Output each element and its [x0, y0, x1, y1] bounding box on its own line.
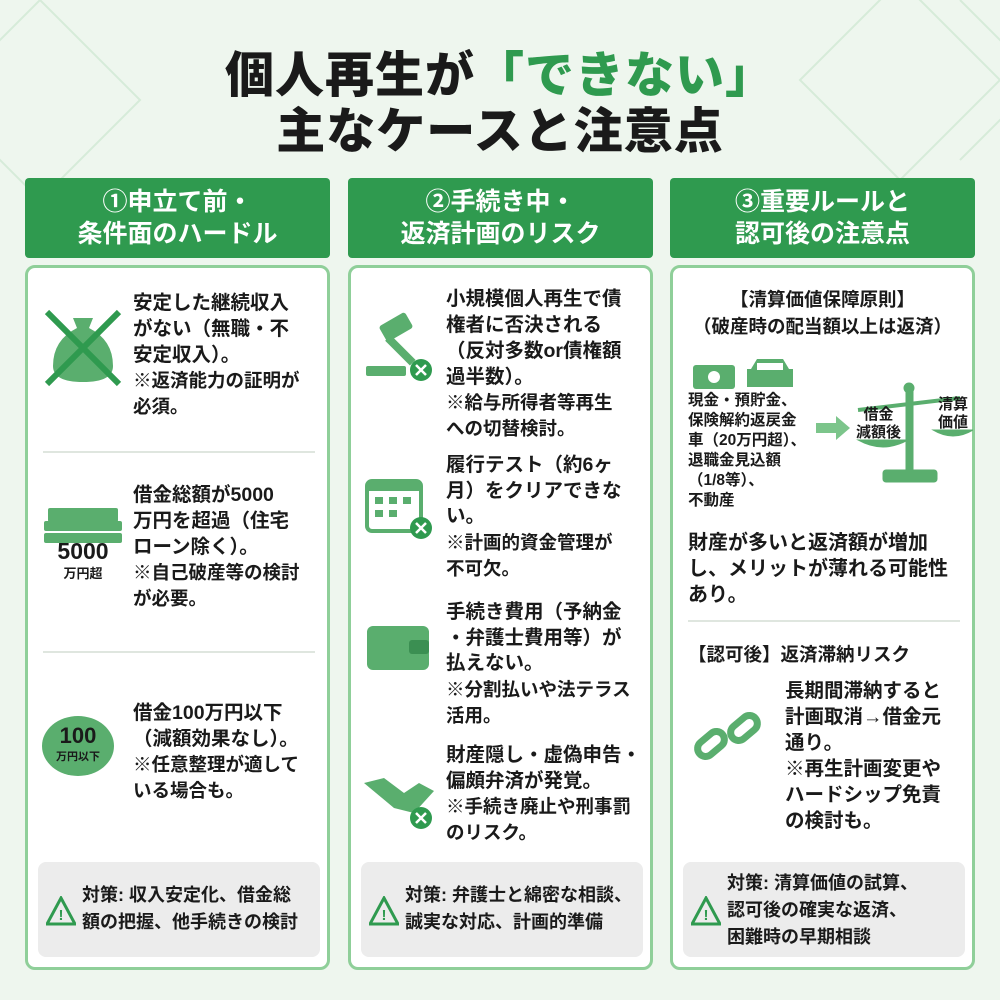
- header: col3: [670, 178, 975, 258]
- icon: 5000 bills: [44, 508, 122, 581]
- icon: 5000 bills: 5000: [57, 538, 109, 564]
- icon: warning: [46, 896, 76, 926]
- icon: wallet: [367, 626, 429, 670]
- icon: calendar: [365, 479, 432, 539]
- icon: scale: 借金: [864, 406, 894, 423]
- panel: col1: [25, 265, 330, 970]
- arrow: [816, 416, 850, 440]
- title: [225, 48, 775, 159]
- callout: col2: 誠実な対応、計画的準備: [405, 912, 603, 932]
- text: item3: ※分割払いや法テラス: [446, 678, 631, 700]
- text: item1: がない（無職・不: [133, 318, 289, 340]
- callout: col2: 対策: 弁護士と綿密な相談、: [405, 885, 632, 905]
- text: item1: [446, 288, 622, 439]
- text: item3: 手続き費用（予納金: [446, 601, 622, 623]
- title: 個人再生が「できない」: [225, 49, 775, 103]
- text: after approval detail: 通り。: [785, 732, 843, 754]
- icon: scale: [856, 382, 973, 482]
- icon: warning: [691, 896, 721, 926]
- text: asset list: [688, 392, 806, 509]
- callout: col3: 対策: 清算価値の試算、: [727, 873, 918, 893]
- text: item3: ・弁護士費用等）が: [446, 626, 622, 648]
- text: item4: 財産隠し・虚偽申告・: [446, 744, 641, 766]
- text: item2: 月）をクリアできな: [446, 480, 622, 502]
- icon: 100 coin: 100: [60, 723, 96, 748]
- icon: warning: !: [704, 907, 708, 924]
- text: item1: 権者に否決される: [446, 314, 602, 336]
- heading: principle: [693, 289, 952, 337]
- text: item1: [133, 292, 300, 417]
- text: after approval detail: の検討も。: [785, 810, 883, 832]
- text: item2: 不可欠。: [446, 558, 520, 579]
- text: item2: い。: [446, 505, 485, 527]
- text: item3: （減額効果なし）。: [133, 728, 299, 750]
- text: after approval detail: [785, 680, 941, 832]
- header: col3: 認可後の注意点: [735, 220, 910, 248]
- text: item3: いる場合も。: [133, 780, 244, 801]
- text: item2: ※自己破産等の検討: [133, 562, 300, 583]
- text: item1: 安定収入）。: [133, 344, 240, 366]
- callout: col1: [38, 862, 320, 957]
- header: col1: 条件面のハードル: [77, 220, 278, 248]
- text: item4: ※手続き廃止や刑事罰: [446, 796, 631, 817]
- header: col2: ②手続き中・: [425, 188, 576, 216]
- text: item2: [133, 484, 300, 609]
- text: item2: 履行テスト（約6ヶ: [446, 454, 613, 476]
- heading: principle: （破産時の配当額以上は返済）: [693, 316, 952, 337]
- text: item2: が必要。: [133, 588, 207, 609]
- title: 主なケースと注意点: [276, 105, 724, 159]
- callout: col1: 対策: 収入安定化、借金総: [82, 885, 291, 905]
- text: item3: 活用。: [446, 705, 502, 726]
- text: item3: [133, 702, 299, 801]
- icon: scale: 価値: [938, 414, 968, 431]
- text: item2: 借金総額が5000: [133, 484, 274, 506]
- text: item2: [446, 454, 622, 579]
- callout: col3: 認可後の確実な返済、: [727, 900, 907, 920]
- icon: handshake: [364, 778, 434, 829]
- text: asset list: 不動産: [688, 492, 735, 509]
- header: col1: ①申立て前・: [102, 188, 252, 216]
- icon: 100 coin: [42, 716, 114, 776]
- callout: col2: [361, 862, 643, 957]
- text: item1: 小規模個人再生で債: [446, 288, 622, 310]
- text: item4: のリスク。: [446, 822, 537, 843]
- text: item1: 必須。: [133, 396, 189, 417]
- text: item1: （反対多数or債権額: [446, 340, 622, 362]
- text: asset list: 車（20万円超）、: [688, 432, 806, 449]
- text: item1: ※返済能力の証明が: [133, 370, 300, 391]
- panel: col2: [348, 265, 653, 970]
- text: asset list: （1/8等）、: [688, 472, 764, 489]
- text: item4: 偏頗弁済が発覚。: [446, 770, 602, 792]
- text: item1: への切替検討。: [446, 418, 576, 439]
- header: col2: 返済計画のリスク: [400, 220, 600, 248]
- text: item2: 万円を超過（住宅: [133, 510, 289, 532]
- callout: col1: 額の把握、他手続きの検討: [82, 912, 298, 932]
- text: item2: ※計画的資金管理が: [446, 532, 613, 552]
- icon: scale: 減額後: [856, 424, 901, 441]
- icon: 100 coin: 万円以下: [56, 751, 100, 763]
- icon: warning: !: [382, 907, 386, 924]
- text: asset warning: あり。: [688, 584, 748, 606]
- heading: principle: 【清算価値保障原則】: [730, 289, 915, 310]
- icon: gavel: [366, 312, 432, 381]
- text: asset list: 現金・預貯金、: [688, 392, 797, 409]
- text: after approval detail: 計画取消→借金元: [785, 706, 941, 728]
- text: item3: 借金100万円以下: [133, 702, 283, 724]
- callout: col3: 困難時の早期相談: [727, 927, 871, 947]
- header: col3: ③重要ルールと: [735, 188, 910, 216]
- header: col1: [25, 178, 330, 258]
- text: item1: ※給与所得者等再生: [446, 392, 613, 413]
- text: after approval detail: ハードシップ免責: [785, 784, 941, 806]
- icon: money bag crossed: [44, 310, 122, 386]
- icon: 5000 bills: 万円超: [63, 566, 102, 581]
- panel: col3: [670, 265, 975, 970]
- text: item3: 払えない。: [446, 652, 544, 674]
- icon: warning: [369, 896, 399, 926]
- text: asset warning: [688, 532, 948, 606]
- header: col2: [348, 178, 653, 258]
- icon: cash and car: [693, 359, 793, 389]
- icon: warning: !: [58, 907, 64, 924]
- text: item4: [446, 744, 641, 843]
- text: asset list: 保険解約返戻金: [688, 412, 797, 429]
- text: after approval detail: ※再生計画変更や: [785, 758, 941, 780]
- text: asset warning: 財産が多いと返済額が増加: [688, 532, 928, 554]
- callout: col3: [683, 862, 965, 957]
- text: item3: ※任意整理が適して: [133, 754, 299, 775]
- text: item3: [446, 601, 631, 726]
- text: item1: 安定した継続収入: [133, 292, 289, 314]
- heading: after approval: 【認可後】返済滞納リスク: [688, 644, 910, 665]
- text: after approval detail: 長期間滞納すると: [785, 680, 941, 702]
- text: item1: 過半数）。: [446, 366, 534, 388]
- text: asset list: 退職金見込額: [688, 452, 781, 469]
- icon: scale: 清算: [938, 396, 968, 413]
- icon: broken chain: [694, 712, 761, 760]
- text: asset warning: し、メリットが薄れる可能性: [688, 558, 948, 580]
- text: item2: ローン除く）。: [133, 536, 259, 558]
